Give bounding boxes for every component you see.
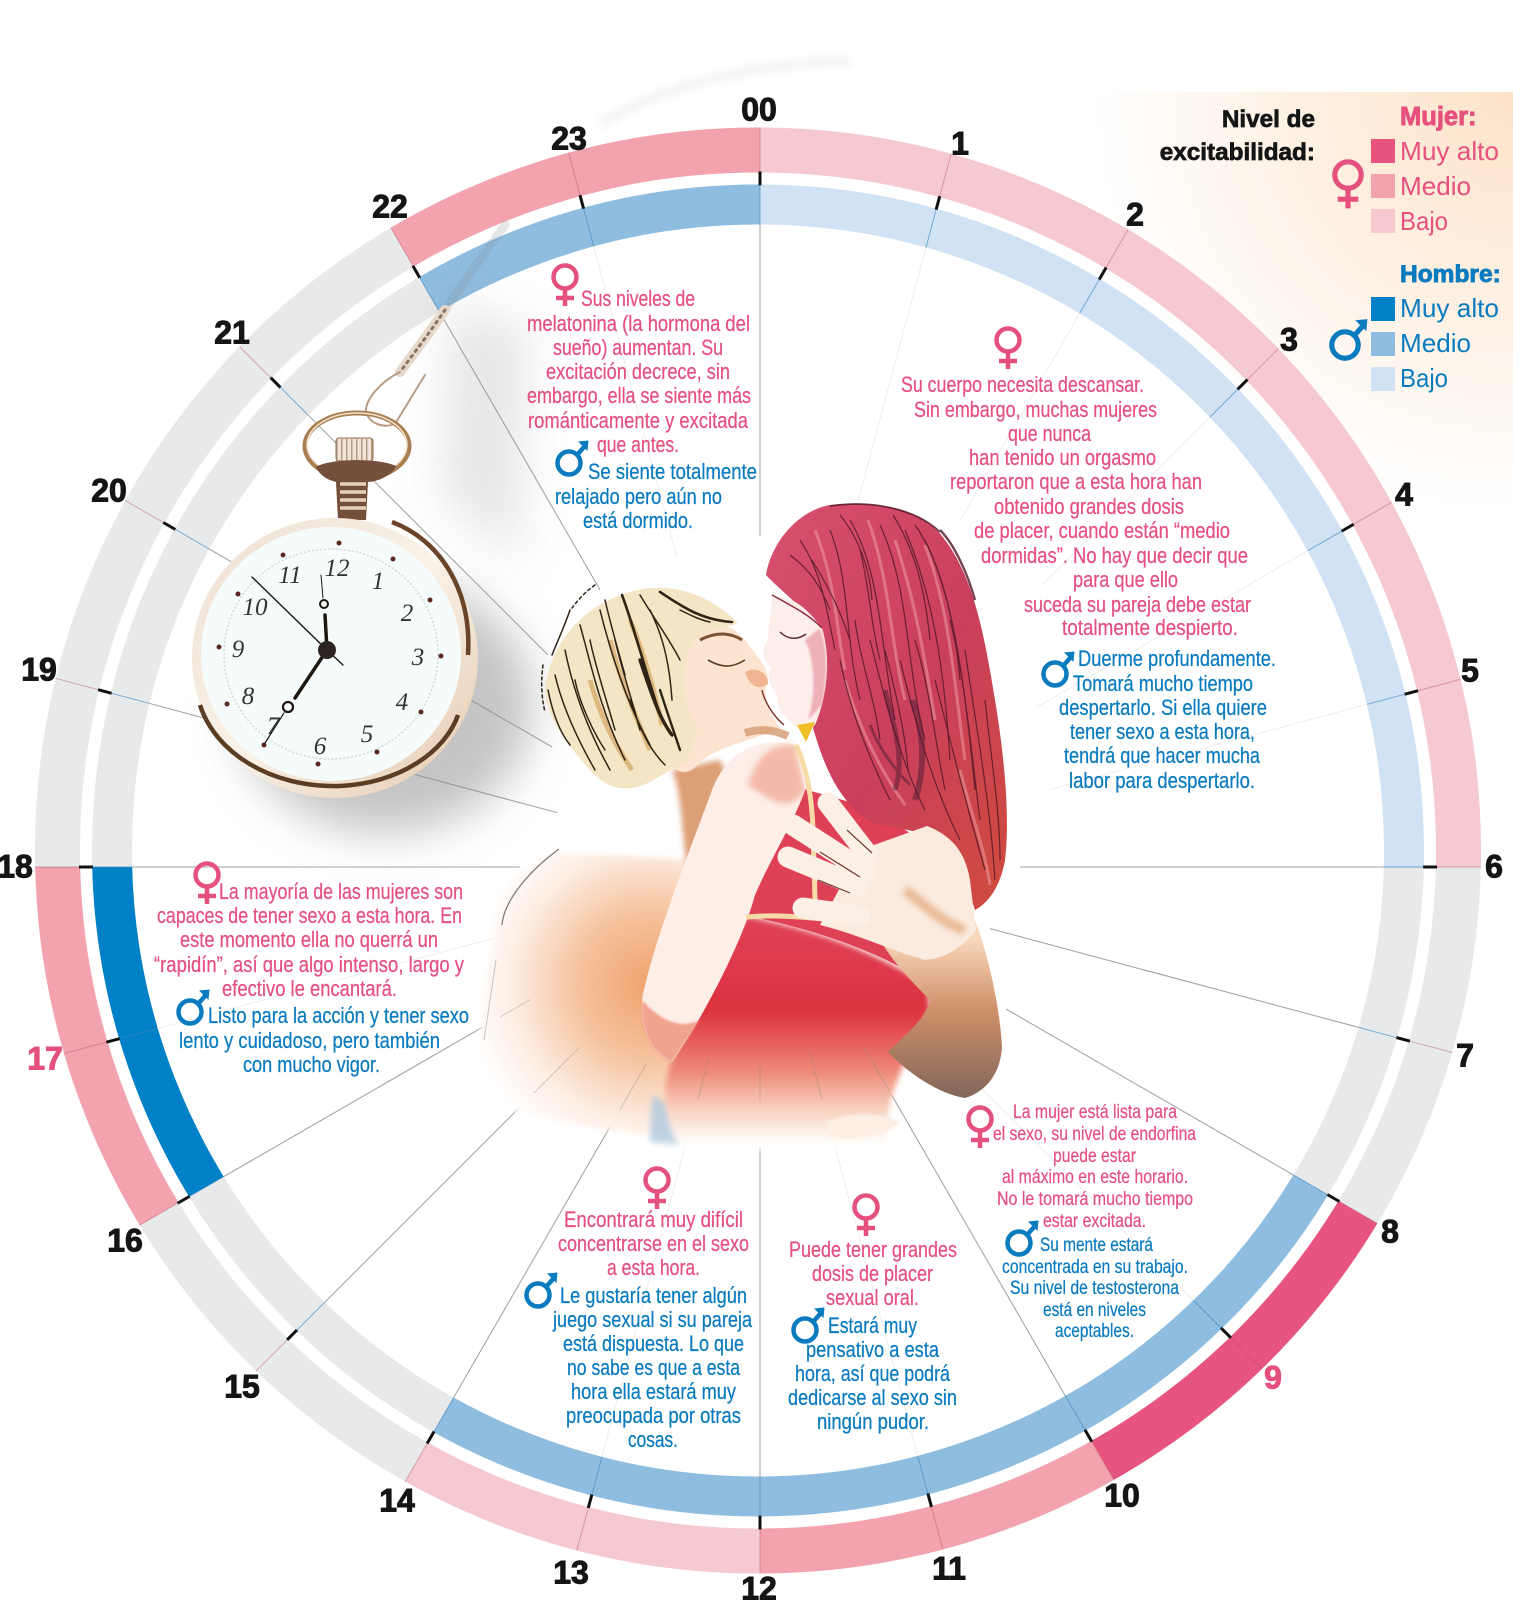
text block: hour 00-06: reportaron que a esta hora han (950, 469, 1202, 494)
hour labels: 21 (214, 314, 250, 350)
hour labels: 11 (932, 1550, 966, 1586)
spokes from rings to centre (132, 224, 1384, 1476)
hour labels: 23 (551, 120, 587, 156)
legend: men (1332, 261, 1501, 393)
text block: hour 00-06: Duerme profundamente. (1078, 646, 1276, 671)
text block: hour 00-06: suceda su pareja debe estar (1024, 592, 1251, 617)
text block: hour 00-06: labor para despertarlo. (1069, 768, 1255, 793)
text block: hour 22-00: románticamente y excitada (528, 408, 749, 433)
text block: hour 16-18: este momento ella no querrá un (180, 927, 438, 952)
legend: women: Medio (1400, 171, 1471, 201)
text block: hour 08-10: estar excitada. (1043, 1210, 1146, 1232)
watch crown (336, 438, 373, 461)
man: hand (788, 803, 976, 960)
woman: hair strands (790, 504, 1000, 880)
couple illustration (478, 504, 1007, 1150)
pocket watch chain (366, 225, 505, 426)
text block: hour 08-10: Su mente estará (1040, 1234, 1153, 1256)
text block: hour 10-12: hora, así que podrá (795, 1361, 951, 1386)
text block: hour 08-10: aceptables. (1055, 1320, 1134, 1342)
watch numerals: 7 (267, 713, 281, 740)
hour labels: 22 (372, 188, 408, 224)
woman: upper back (742, 785, 952, 985)
hour labels: 16 (107, 1222, 143, 1258)
text block: hour 00-06: que nunca (1008, 421, 1092, 446)
text block: hour 16-18 (154, 864, 469, 1077)
pocket watch (192, 413, 478, 798)
text block: hour 12-14: concentrarse en el sexo (558, 1231, 749, 1256)
text block: hour 08-10: La mujer está lista para (1013, 1101, 1177, 1123)
text block: hour 00-06: Su cuerpo necesita descansar. (901, 372, 1144, 397)
text block: hour 12-14: Le gustaría tener algún (560, 1283, 747, 1308)
watch numerals: 5 (361, 721, 373, 748)
text block: hour 10-12 (788, 1196, 957, 1434)
woman: hair (766, 504, 1007, 910)
watch numerals: 11 (278, 562, 302, 589)
text block: hour 00-06: para que ello (1073, 567, 1178, 592)
text block: hour 00-06: han tenido un orgasmo (969, 445, 1156, 470)
text block: hour 12-14: está dispuesta. Lo que (563, 1331, 744, 1356)
text block: hour 00-06: tener sexo a esta hora, (1070, 719, 1255, 744)
watch hour dots (216, 540, 444, 766)
text block: hour 08-10: concentrada en su trabajo. (1002, 1256, 1188, 1278)
legend: women: Bajo (1400, 206, 1448, 236)
pocket watch shadow (237, 300, 533, 833)
hour labels: 00 (741, 92, 777, 128)
text block: hour 10-12: sexual oral. (826, 1285, 919, 1310)
text block: hour 08-10: No le tomará mucho tiempo (997, 1188, 1193, 1210)
text block: hour 16-18: “rapidín”, así que algo intenso, largo y (154, 952, 464, 977)
text block: hour 00-06: obtenido grandes dosis (994, 494, 1184, 519)
text block: hour 10-12: Puede tener grandes (789, 1237, 957, 1262)
watch numerals: 12 (324, 555, 350, 582)
legend: men: Medio (1400, 328, 1471, 358)
man: hair (545, 588, 738, 788)
legend: women (1335, 103, 1499, 236)
text block: hour 08-10: al máximo en este horario. (1002, 1166, 1188, 1188)
hour labels: 15 (224, 1368, 260, 1404)
bra straps (746, 745, 836, 920)
text block: hour 12-14: preocupada por otras (566, 1403, 741, 1428)
legend: men: Muy alto (1400, 293, 1499, 323)
text block: hour 10-12: pensativo a esta (806, 1337, 940, 1362)
text block: hour 16-18: Listo para la acción y tener sexo (208, 1003, 469, 1028)
hour labels: 14 (379, 1482, 415, 1518)
text block: hour 00-06: dormidas”. No hay que decir que (981, 543, 1248, 568)
text block: hour 16-18: La mayoría de las mujeres son (219, 879, 463, 904)
text block: hour 08-10: el sexo, su nivel de endorfina (993, 1123, 1196, 1145)
hour labels: 13 (553, 1554, 589, 1590)
legend title: excitabilidad: (1160, 139, 1315, 166)
text block: hour 00-06 (901, 328, 1276, 793)
text block: hour 10-12: ningún pudor. (817, 1409, 929, 1434)
watch bow (305, 413, 409, 479)
legend title: Nivel de (1222, 106, 1315, 133)
legend: women: Mujer: (1400, 103, 1476, 131)
yellow top corner (797, 722, 815, 742)
watch numerals: 10 (242, 594, 268, 621)
watch hands (252, 575, 343, 743)
text block: hour 22-00: embargo, ella se siente más (527, 383, 751, 408)
legend: men: Hombre: (1400, 261, 1501, 288)
text block: hour 22-00: está dormido. (583, 508, 693, 533)
text block: hour 22-00: melatonina (la hormona del (527, 311, 750, 336)
text block: hour 16-18: efectivo le encantará. (222, 976, 397, 1001)
man: face (660, 624, 780, 772)
watch case (192, 518, 478, 798)
text block: hour 12-14: no sabe es que a esta (567, 1355, 741, 1380)
man: neck (672, 760, 735, 880)
hour labels: 20 (91, 472, 127, 508)
text block: hour 12-14: hora ella estará muy (571, 1379, 736, 1404)
legend title (1160, 106, 1315, 166)
hour labels: 8 (1381, 1214, 1399, 1250)
text block: hour 12-14 (526, 1168, 753, 1452)
hour labels: 9 (1264, 1360, 1282, 1396)
watch numerals: 3 (411, 644, 424, 671)
text block: hour 12-14: juego sexual si su pareja (552, 1307, 753, 1332)
legend: women: Muy alto (1400, 136, 1499, 166)
watch numerals: 9 (232, 636, 245, 663)
text block: hour 16-18: capaces de tener sexo a esta hora. En (157, 903, 462, 928)
hour labels: 6 (1485, 848, 1503, 884)
text block: hour 08-10: Su nivel de testosterona (1010, 1277, 1179, 1299)
hour labels: 3 (1280, 322, 1298, 358)
text block: hour 10-12: Estará muy (828, 1313, 917, 1338)
legend: men: Bajo (1400, 363, 1448, 393)
watch numerals: 8 (242, 683, 255, 710)
watch numerals: 4 (396, 689, 408, 716)
text block: hour 12-14: Encontrará muy difícil (564, 1207, 743, 1232)
text block: hour 00-06: despertarlo. Si ella quiere (1059, 695, 1267, 720)
jeans (650, 1095, 685, 1145)
watch numerals: 1 (372, 568, 384, 595)
text block: hour 00-06: totalmente despierto. (1062, 615, 1238, 640)
man: torso (478, 852, 700, 1135)
text block: hour 22-00: Sus niveles de (581, 286, 695, 311)
woman: lower back (665, 916, 930, 1150)
hour labels: 5 (1461, 652, 1479, 688)
text block: hour 12-14: cosas. (628, 1427, 678, 1452)
text block: hour 22-00: sueño) aumentan. Su (553, 335, 723, 360)
text block: hour 08-10: está en niveles (1043, 1299, 1146, 1321)
hour labels: 19 (21, 652, 57, 688)
text block: hour 22-00 (527, 266, 757, 533)
hour labels: 1 (951, 126, 969, 162)
text block: hour 00-06: tendrá que hacer mucha (1064, 743, 1261, 768)
hour labels: 2 (1126, 196, 1144, 232)
watch numerals: 6 (314, 733, 327, 760)
text block: hour 16-18: lento y cuidadoso, pero también (179, 1028, 440, 1053)
woman: hair highlights (815, 520, 990, 885)
text block: hour 10-12: dedicarse al sexo sin (788, 1385, 957, 1410)
hour labels: 4 (1395, 476, 1413, 512)
hour labels: 10 (1104, 1478, 1140, 1514)
text block: hour 08-10 (968, 1101, 1196, 1342)
faint spokes over the figures (500, 1000, 889, 1109)
text block: hour 00-06: Tomará mucho tiempo (1073, 671, 1253, 696)
inner ring: men's excitability (112, 204, 1404, 1496)
text block: hour 08-10: puede estar (1053, 1145, 1136, 1167)
text block: hour 22-00: excitación decrece, sin (546, 359, 730, 384)
text block: hour 00-06: de placer, cuando están “medio (974, 518, 1230, 543)
watch neck (316, 460, 396, 520)
faint chain smudge at top (600, 62, 850, 125)
hour labels: 17 (27, 1040, 63, 1076)
background: peach corner gradient (1000, 92, 1513, 522)
text block: hour 12-14: a esta hora. (607, 1255, 700, 1280)
text block: hour 22-00: que antes. (597, 432, 679, 457)
man: forearm (880, 918, 1002, 1098)
text block: hour 22-00: relajado pero aún no (555, 484, 722, 509)
watch numerals (232, 555, 424, 760)
woman: arm (642, 742, 805, 1062)
text block: hour 22-00: Se siente totalmente (588, 459, 757, 484)
text block: hour 16-18: con mucho vigor. (243, 1052, 380, 1077)
text block: hour 10-12: dosis de placer (812, 1261, 933, 1286)
woman: face (763, 597, 827, 727)
watch numerals: 2 (401, 600, 413, 627)
man: lower hand on back (827, 1114, 900, 1138)
text block: hour 00-06: Sin embargo, muchas mujeres (914, 397, 1157, 422)
hour labels: 7 (1456, 1038, 1474, 1074)
man: hair strands (542, 585, 732, 770)
